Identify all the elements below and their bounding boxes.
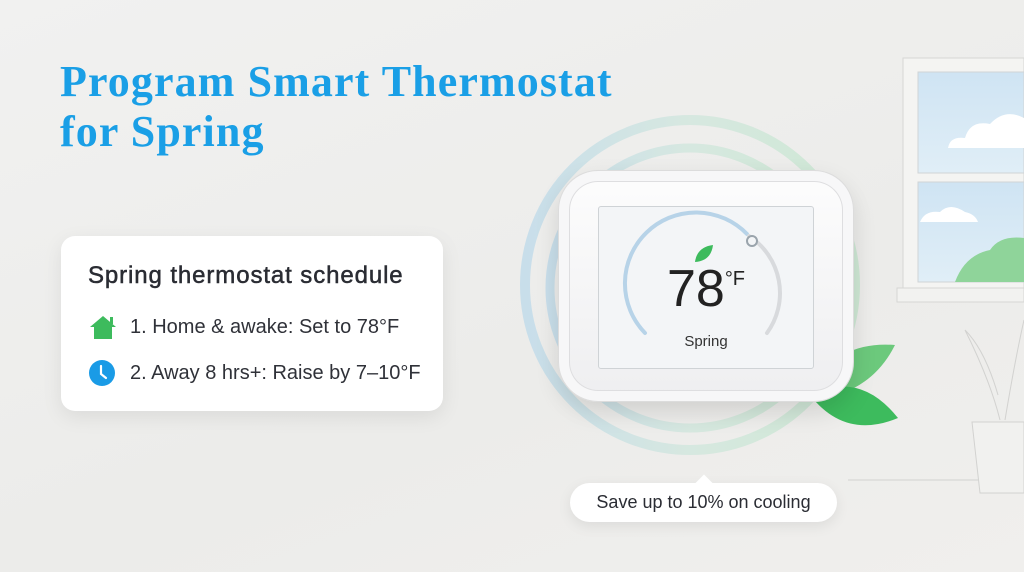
rings: [525, 120, 855, 450]
leaves: [810, 345, 895, 400]
title: for Spring: [60, 107, 265, 156]
thermostat device: [558, 170, 854, 402]
item: away: 2. Away 8 hrs+: Raise by 7–10°F: [130, 362, 421, 384]
callout: [570, 483, 837, 522]
panel: schedule card: [61, 236, 443, 411]
item: home: 1. Home & awake: Set to 78°F: [130, 316, 399, 338]
window: [897, 58, 1024, 302]
title: [60, 57, 613, 156]
temperature: 78°F: [667, 260, 745, 318]
callout: Save up to 10% on cooling: [596, 492, 811, 512]
heading: Spring thermostat schedule: [88, 262, 404, 289]
plant: [848, 320, 1024, 493]
screen: [598, 206, 814, 369]
icon: leaf: [695, 245, 713, 262]
title: Program Smart Thermostat: [60, 57, 613, 106]
label: Spring: [684, 333, 728, 350]
